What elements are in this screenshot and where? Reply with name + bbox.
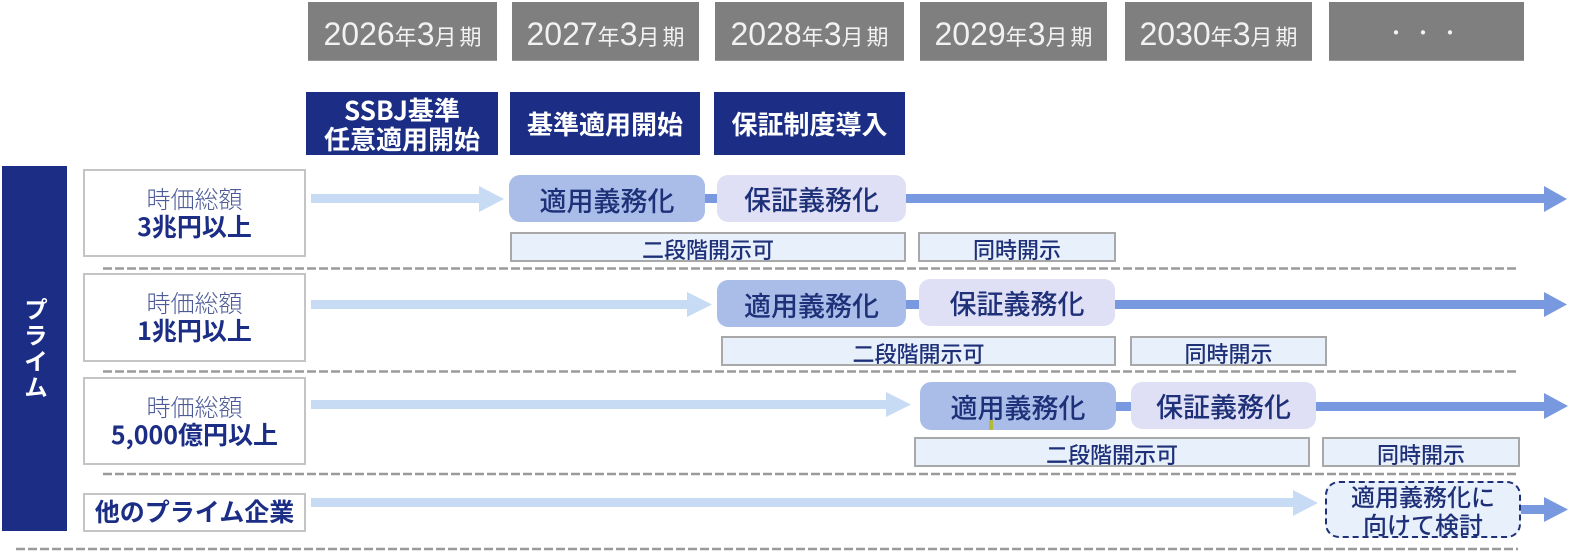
row 1: simultaneous disclosure <box>918 232 1116 262</box>
year: 2029: 期 <box>1070 20 1093 52</box>
row label: 1 trillion yen <box>83 273 306 362</box>
row label: 500 billion yen <box>83 377 306 465</box>
row 2: simultaneous disclosure <box>1130 336 1327 366</box>
year: 2030 <box>1125 2 1312 61</box>
year: 2029: 年 <box>1006 20 1028 52</box>
year: 2026: 月 <box>434 20 456 52</box>
row label: other Prime companies: 他のプライム企業 <box>95 493 294 529</box>
row 2: two-stage disclosure <box>721 336 1116 366</box>
row 2: mandatory application <box>717 280 906 327</box>
year: 2028: 期 <box>866 20 889 52</box>
row 2: mandatory application: 適用義務化 <box>744 284 879 324</box>
row label: 3 trillion yen: 3兆円以上 <box>137 208 252 244</box>
row 3: mandatory application: 適用義務化 <box>950 387 1086 426</box>
row label: 3 trillion yen: 時価総額 <box>146 180 242 214</box>
row label: 3 trillion yen <box>83 169 306 257</box>
year: 2030: 2030 3 <box>1139 16 1250 52</box>
year: 2028: 年 <box>802 20 824 52</box>
panel: Prime market side label <box>2 166 67 531</box>
year: 2030: 期 <box>1276 20 1298 52</box>
row 4: considering mandatory application <box>1325 481 1521 538</box>
row 1: two-stage disclosure <box>510 232 906 262</box>
year: 2027: 期 <box>662 20 685 52</box>
year: 2029 <box>920 2 1107 61</box>
row 4: considering mandatory application: 適用義務化に <box>1351 478 1495 512</box>
year: 2026: 2026 3 <box>323 16 434 52</box>
row label: 500 billion yen: 5,000億円以上 <box>111 416 278 452</box>
milestone: assurance introduction <box>714 92 905 155</box>
year: 2027: 2027 3 <box>526 16 637 52</box>
year: continuing <box>1329 2 1524 61</box>
milestone: standard application start <box>510 92 700 155</box>
row 2: mandatory assurance: 保証義務化 <box>950 283 1084 322</box>
year: 2028 <box>715 2 904 61</box>
year: 2028: 2028 3 <box>730 16 841 52</box>
row 4: considering mandatory application: 向けて検討 <box>1363 506 1483 540</box>
row 3: mandatory application <box>920 382 1116 430</box>
year: 2027: 月 <box>637 20 660 52</box>
year: 2027: 年 <box>598 20 620 52</box>
row 3: simultaneous disclosure <box>1322 437 1520 467</box>
row 1: mandatory assurance: 保証義務化 <box>744 179 879 218</box>
row 3: mandatory assurance: 保証義務化 <box>1156 386 1291 425</box>
year: 2028: 月 <box>841 20 864 52</box>
milestone: assurance introduction: 保証制度導入 <box>731 105 888 142</box>
year: 2026: 年 <box>395 20 417 52</box>
year: 2030: 月 <box>1250 20 1272 52</box>
year: 2026 <box>308 2 497 61</box>
milestone: standard application start: 基準適用開始 <box>527 105 683 142</box>
panel: Prime market side label: プライム <box>18 296 54 400</box>
row 1: mandatory application <box>509 175 705 222</box>
row 1: mandatory assurance <box>717 175 906 222</box>
row label: 500 billion yen: 時価総額 <box>146 388 242 422</box>
year: 2029: 2029 3 <box>934 16 1045 52</box>
year: 2026: 期 <box>460 20 482 52</box>
row 3: mandatory assurance <box>1131 382 1316 429</box>
row 2: mandatory assurance <box>919 279 1115 326</box>
row 3: two-stage disclosure <box>914 437 1310 467</box>
year: 2027 <box>512 2 699 61</box>
year: 2030: 年 <box>1211 20 1233 52</box>
row label: 1 trillion yen: 時価総額 <box>146 284 242 319</box>
small yellow mark <box>989 420 993 430</box>
year: 2029: 月 <box>1045 20 1068 52</box>
milestone: voluntary application: SSBJ基準 <box>344 90 460 128</box>
milestone: voluntary application <box>306 92 498 155</box>
row 1: mandatory application: 適用義務化 <box>540 180 674 218</box>
milestone: voluntary application: 任意適用開始 <box>324 120 480 156</box>
year: continuing: ・・・ <box>1386 17 1467 46</box>
row label: 1 trillion yen: 1兆円以上 <box>137 312 252 348</box>
fiscal year header row <box>308 2 1524 61</box>
